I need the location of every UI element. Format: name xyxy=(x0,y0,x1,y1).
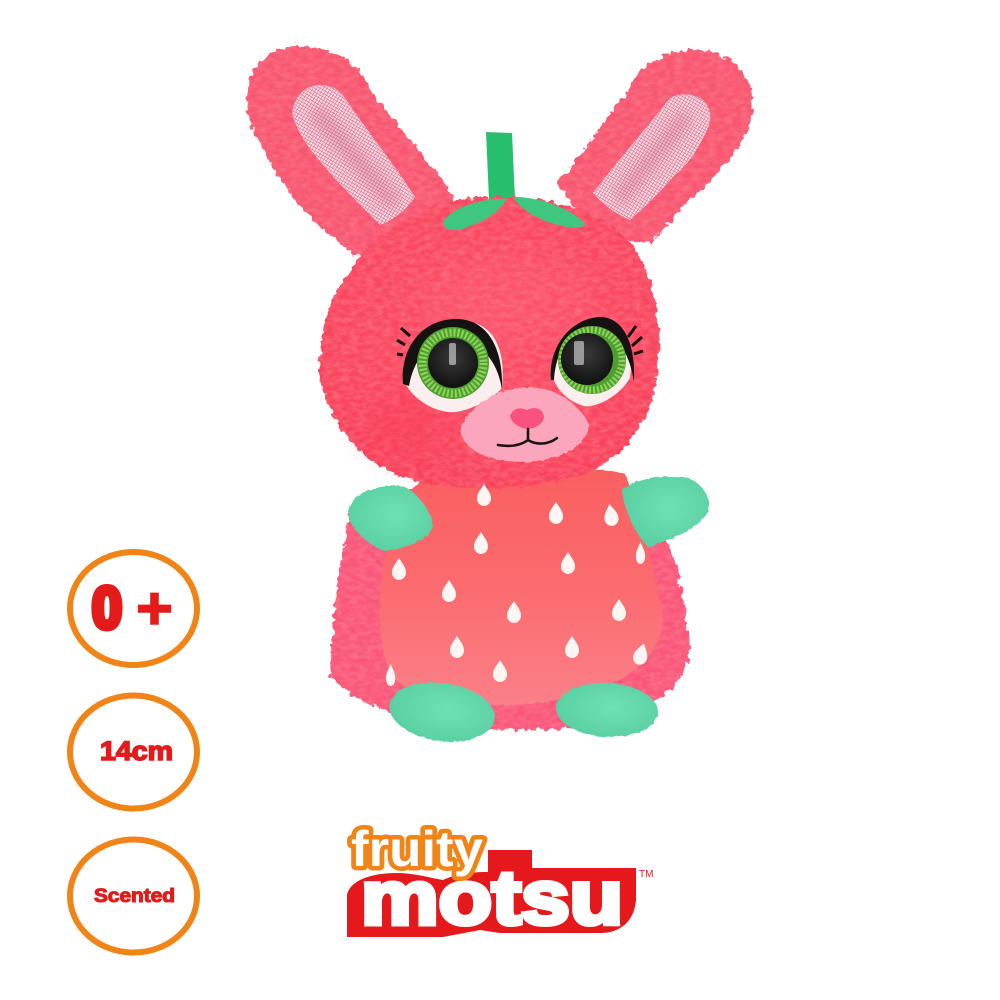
badge: age 0+: + xyxy=(136,575,173,642)
badge: age 0+ xyxy=(70,552,197,665)
badge: scented xyxy=(70,840,197,952)
logo backing xyxy=(347,850,636,937)
trademark: TM xyxy=(639,869,653,880)
head xyxy=(319,197,659,488)
badge: age 0+: 0 xyxy=(92,576,122,641)
logo word fruity: fruity xyxy=(351,821,483,877)
right eye xyxy=(551,317,643,406)
mouth xyxy=(498,429,557,446)
right arm xyxy=(622,476,709,547)
right ear xyxy=(557,50,753,242)
left foot xyxy=(385,676,499,748)
body fur xyxy=(330,486,689,730)
logo: Fruity Motsu xyxy=(347,821,653,941)
right foot xyxy=(555,680,659,740)
plush bunny toy xyxy=(246,46,753,748)
belly xyxy=(380,465,663,705)
badge: size 14cm: 14cm xyxy=(100,736,173,766)
left arm xyxy=(348,486,433,551)
left eye xyxy=(397,319,503,412)
muzzle xyxy=(461,387,589,462)
leaves xyxy=(443,197,585,230)
logo word motsu: motsu xyxy=(361,856,623,941)
badge: scented: Scented xyxy=(94,886,175,907)
left ear xyxy=(246,46,470,270)
nose xyxy=(510,408,544,429)
stem xyxy=(486,132,515,200)
strawberry seeds xyxy=(386,484,651,686)
badge: size 14cm xyxy=(70,696,197,808)
